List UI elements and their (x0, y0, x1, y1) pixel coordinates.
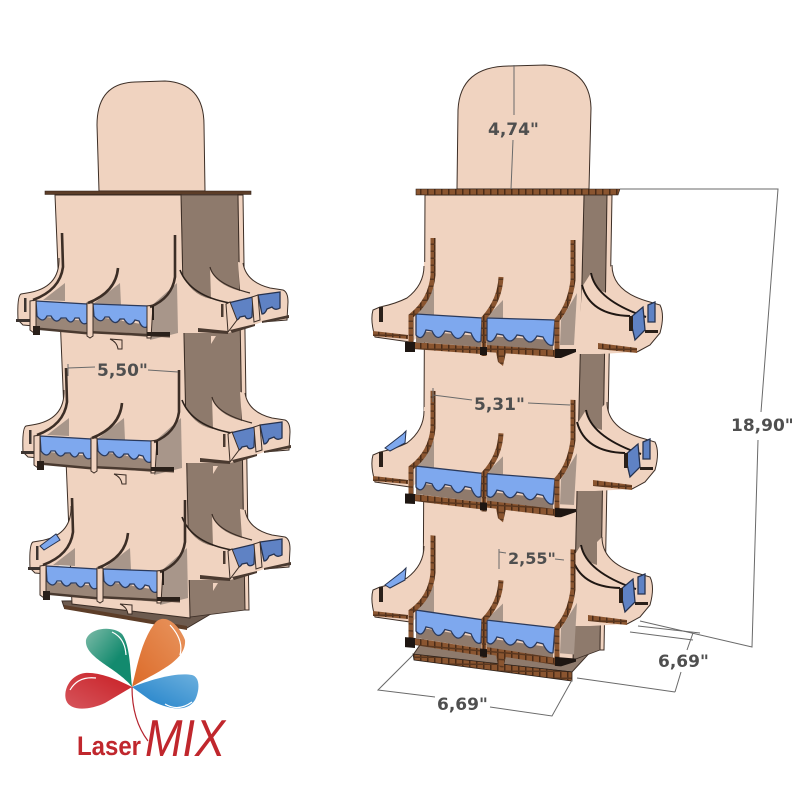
logo wordmark Laser: Laser (77, 731, 141, 761)
left tower shelf tier 3 (28, 488, 291, 614)
left tower side panel (181, 195, 245, 617)
dimension: right tower shelf 5,31 (433, 388, 570, 415)
dimension: left tower shelf 5,50 (68, 361, 178, 381)
logo stem (132, 687, 148, 741)
right tower shelf tier 3 (372, 533, 652, 676)
right tower front face (423, 195, 584, 662)
logo petal: green (86, 629, 132, 687)
logo petal: red (65, 673, 132, 709)
dimension: right tower shelf 5,31: 5,31" (474, 395, 525, 415)
LaserMIX logo (65, 619, 227, 768)
dimension: compartment 2,55 (499, 549, 564, 569)
dimension: depth 6,69: 6,69" (658, 652, 709, 672)
left tower front face (55, 195, 190, 618)
left tower dome (97, 81, 205, 191)
logo petal: orange (132, 619, 185, 687)
logo petal: blue (132, 674, 198, 708)
dimension: height 18,90 (620, 189, 794, 647)
left tower shelf tier 1 (16, 233, 289, 349)
right display tower (372, 65, 662, 681)
right tower top board (416, 189, 620, 195)
dimension: height 18,90: 18,90" (731, 416, 794, 436)
dimension: compartment 2,55: 2,55" (508, 549, 556, 568)
dimension: width 6,69 (378, 655, 572, 716)
logo wordmark MIX: MIX (145, 710, 227, 768)
left display tower (16, 81, 291, 630)
dimension: left tower shelf 5,50: 5,50" (97, 361, 148, 381)
left tower shelf tier 2 (21, 368, 291, 484)
left tower top board (45, 191, 251, 194)
right tower shelf tier 2 (372, 390, 658, 526)
right tower side panel (573, 195, 607, 660)
dimension: width 6,69: 6,69" (437, 695, 488, 715)
dimension: dome width 4,74: 4,74" (488, 120, 539, 140)
right tower dome (457, 65, 591, 189)
dimension: depth 6,69 (577, 626, 709, 692)
right tower base plate (413, 642, 595, 672)
left tower base plate (62, 600, 221, 628)
right tower shelf tier 1 (372, 238, 662, 366)
logo highlights (70, 625, 192, 708)
dimension: dome width 4,74 (488, 65, 539, 189)
